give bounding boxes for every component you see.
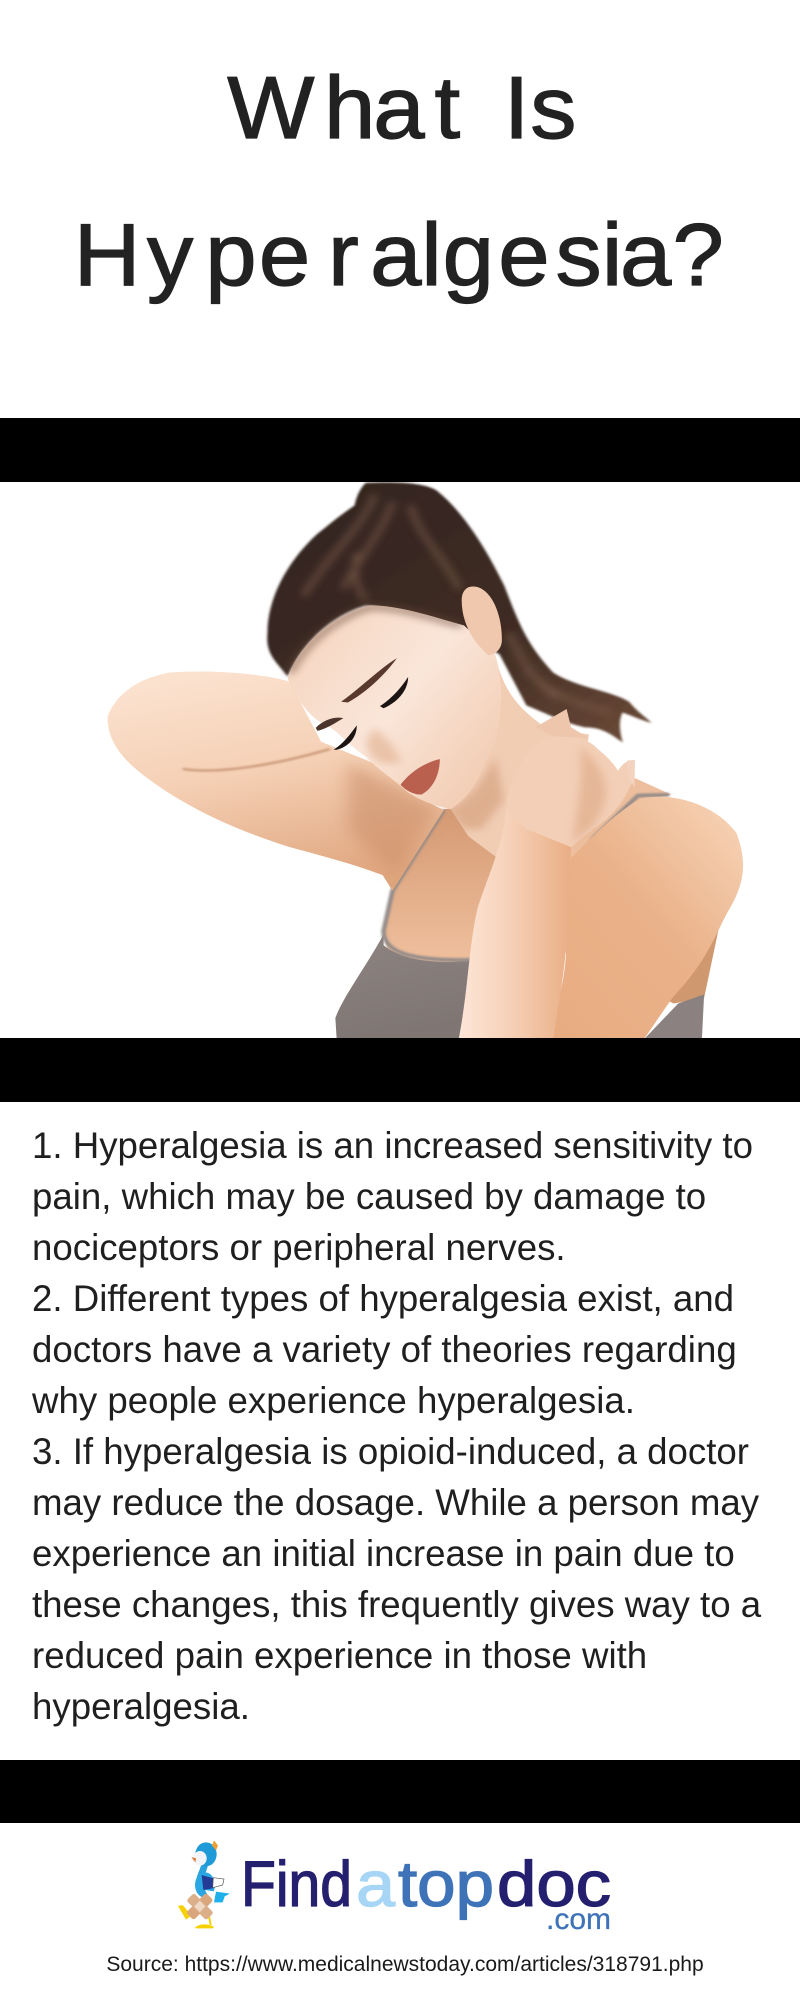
- photo: woman holding her neck in pain: [108, 482, 744, 1038]
- icon: duck mascot with bandage: [178, 1840, 230, 1928]
- title: Hyperalgesia?: [74, 206, 724, 305]
- body text: [32, 1124, 762, 1726]
- body text: 3. If hyperalgesia is opioid-induced, a doctor: [32, 1430, 749, 1472]
- black band 3: [0, 1760, 800, 1823]
- arm crease: [183, 749, 330, 770]
- body text: hyperalgesia.: [32, 1686, 250, 1726]
- neck: [451, 654, 589, 880]
- chest: [384, 807, 576, 965]
- body text: 1. Hyperalgesia is an increased sensitivity to: [32, 1124, 753, 1166]
- straps: [384, 795, 669, 960]
- hand: [506, 736, 635, 847]
- body text: why people experience hyperalgesia.: [32, 1380, 635, 1420]
- source line: Source: https://www.medicalnewstoday.com/articles/318791.php: [106, 1953, 704, 1976]
- logo wordmark: Find: [241, 1848, 352, 1920]
- face: [288, 605, 501, 809]
- right upper arm: [526, 797, 743, 1040]
- fingers: [627, 760, 635, 787]
- body text: these changes, this frequently gives way to a: [32, 1584, 761, 1624]
- body text: may reduce the dosage. While a person may: [32, 1482, 759, 1522]
- forearm: [459, 807, 571, 1040]
- armpit shade: [348, 764, 437, 873]
- tank top left: [335, 934, 473, 1040]
- body text: reduced pain experience in those with: [32, 1634, 647, 1676]
- black band 2: [0, 1038, 800, 1102]
- body text: pain, which may be caused by damage to: [32, 1176, 706, 1216]
- body text: experience an initial increase in pain due to: [32, 1532, 735, 1574]
- hair: [267, 482, 651, 742]
- body text: nociceptors or peripheral nerves.: [32, 1226, 566, 1268]
- hair front edge shade: [290, 607, 462, 673]
- nose shade: [366, 727, 401, 763]
- body text: 2. Different types of hyperalgesia exist, and: [32, 1278, 734, 1318]
- trapezius: [567, 778, 672, 884]
- eyebrow right: [341, 658, 397, 702]
- eyelashes left: [334, 725, 357, 750]
- logo wordmark: [241, 1848, 611, 1936]
- ear: [462, 586, 502, 655]
- body text: doctors have a variety of theories regarding: [32, 1328, 737, 1370]
- raised left arm: [108, 672, 444, 891]
- title: What Is: [227, 59, 576, 158]
- logo wordmark: top: [398, 1848, 494, 1920]
- back of right arm: [567, 894, 723, 1003]
- hair highlights: [303, 495, 611, 713]
- neck shadow: [446, 756, 504, 829]
- eyelashes right: [380, 677, 408, 708]
- eyebrow left: [316, 718, 343, 731]
- title: [74, 59, 724, 305]
- logo wordmark: .com: [546, 1903, 611, 1936]
- hand shading: [573, 745, 606, 844]
- black band 1: [0, 418, 800, 482]
- logo wordmark: doc: [497, 1848, 611, 1920]
- lips: [401, 759, 440, 795]
- logo wordmark: a: [356, 1848, 395, 1920]
- tank top right: [643, 994, 704, 1040]
